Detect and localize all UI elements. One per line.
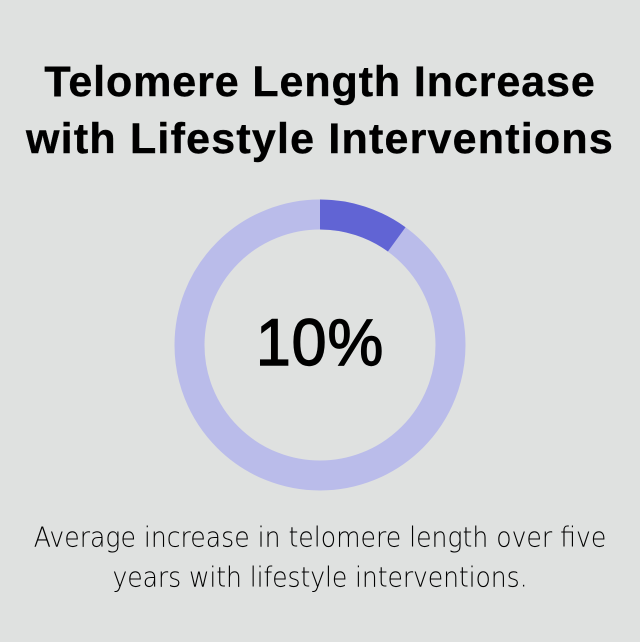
description xyxy=(34,521,606,592)
title xyxy=(26,58,614,163)
donut segment: 10% xyxy=(320,214,397,239)
title: with Lifestyle Interventions xyxy=(26,115,614,163)
title: Telomere Length Increase xyxy=(44,58,596,106)
center value: 10% xyxy=(256,305,384,379)
description: years with lifestyle interventions. xyxy=(113,561,527,592)
description: Average increase in telomere length over five xyxy=(34,521,606,552)
